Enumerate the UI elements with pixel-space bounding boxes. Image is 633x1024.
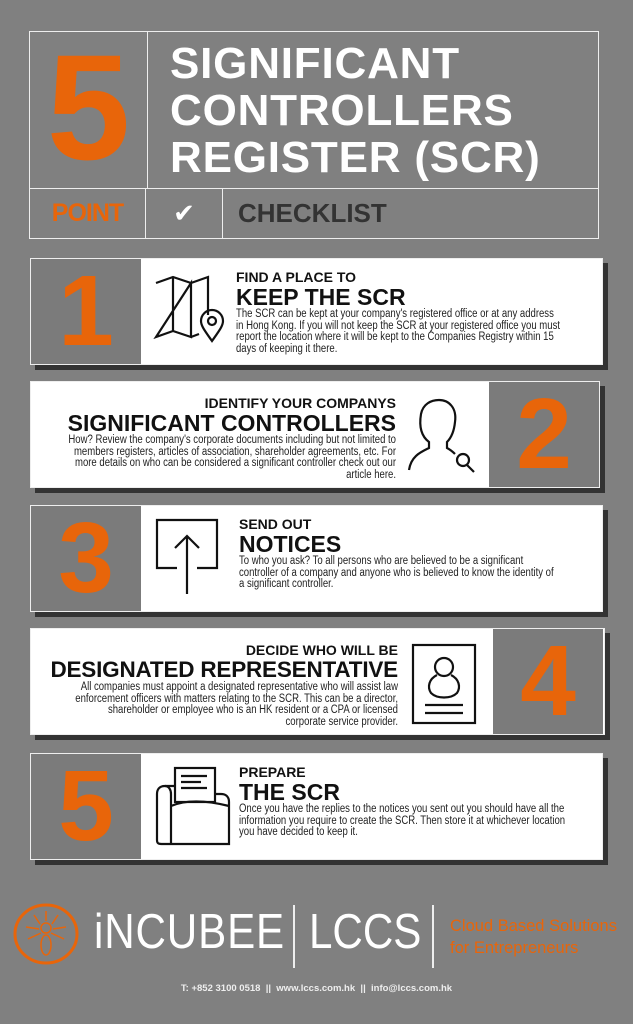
contact line: T: +852 3100 0518 || www.lccs.com.hk || info@lccs.com.hk xyxy=(181,983,452,994)
number 5: 5 xyxy=(58,750,114,862)
big number 5 xyxy=(30,32,148,188)
divider xyxy=(432,905,434,968)
number 1: 1 xyxy=(58,255,114,367)
icon: fax / printer xyxy=(156,766,230,846)
step 5 text: Once you have the replies to the notices you sent out you should have all the information you require to create the SCR. Then store it at whichever location you have decided to keep it. xyxy=(239,803,565,838)
CHECKLIST label: CHECKLIST xyxy=(238,198,387,228)
step 2 text xyxy=(68,395,396,481)
tagline xyxy=(450,917,617,957)
step 5 text: PREPARE xyxy=(239,764,306,780)
panel: step 1 xyxy=(30,258,603,365)
title: SIGNIFICANT xyxy=(170,39,460,88)
step 4 text: DESIGNATED REPRESENTATIVE xyxy=(50,657,398,682)
brand: iNCUBEE: iNCUBEE xyxy=(94,905,285,959)
POINT label: POINT xyxy=(52,199,123,227)
title: REGISTER (SCR) xyxy=(170,133,541,182)
step 3 text: NOTICES xyxy=(239,531,341,557)
step 1 text: KEEP THE SCR xyxy=(236,284,406,310)
POINT label xyxy=(30,189,146,238)
panel: step 3 xyxy=(30,505,603,612)
icon: map with pin xyxy=(153,276,224,343)
number 3 xyxy=(31,506,141,611)
step 3 text xyxy=(239,516,554,590)
icon: ID card xyxy=(412,644,476,724)
check icon xyxy=(146,189,223,238)
step 1 text xyxy=(236,269,560,355)
step 5 text: THE SCR xyxy=(239,779,340,805)
step 3 text: SEND OUT xyxy=(239,516,311,532)
tagline: for Entrepreneurs xyxy=(450,939,578,957)
step 1 text: The SCR can be kept at your company's registered office or at any address in Hong Kong. If you will not keep the SCR at your registered office you must report the location where it will be kept to the Companies Registry within 15 days of keeping it there. xyxy=(236,308,560,355)
number 4: 4 xyxy=(520,625,576,737)
panel: step 5 xyxy=(30,753,603,860)
divider xyxy=(293,905,295,968)
brand: LCCS: LCCS xyxy=(309,905,421,959)
header box xyxy=(29,31,599,239)
big number 5: 5 xyxy=(47,23,130,191)
tagline: Cloud Based Solutions xyxy=(450,917,617,935)
number 1 xyxy=(31,259,141,364)
number 3: 3 xyxy=(58,502,114,614)
number 2 xyxy=(489,382,599,487)
number 2: 2 xyxy=(516,378,572,490)
title xyxy=(170,39,541,182)
bottom row xyxy=(30,188,598,238)
panel: step 2 xyxy=(30,381,600,488)
number 4 xyxy=(493,629,603,734)
step 1 text: FIND A PLACE TO xyxy=(236,269,356,285)
check icon: ✔ xyxy=(173,198,195,228)
step 4 text xyxy=(50,642,398,728)
step 4 text: All companies must appoint a designated representative who will assist law enforcement officers with matters relating to the SCR. This can be a director, shareholder or employee who is an HK resident or a CPA or licensed corporate service provider. xyxy=(75,681,398,728)
step 4 text: DECIDE WHO WILL BE xyxy=(246,642,398,658)
step 5 text xyxy=(239,764,565,838)
number 5 xyxy=(31,754,141,859)
icon: person with magnifier xyxy=(408,398,475,473)
step 2 text: IDENTIFY YOUR COMPANYS xyxy=(205,395,396,411)
step 2 text: SIGNIFICANT CONTROLLERS xyxy=(68,410,396,436)
step 2 text: How? Review the company's corporate documents including but not limited to members registers, articles of association, shareholder agreements, etc. For more details on who can be considered a significant controller check out our article here. xyxy=(68,434,396,481)
title: CONTROLLERS xyxy=(170,86,514,135)
panel: step 4 xyxy=(30,628,605,735)
footer logo: bee circle xyxy=(14,904,78,964)
icon: upload box xyxy=(156,518,218,594)
step 3 text: To who you ask? To all persons who are believed to be a significant controller of a company and anyone who is believed to know the identity of a significant controller. xyxy=(239,555,554,590)
